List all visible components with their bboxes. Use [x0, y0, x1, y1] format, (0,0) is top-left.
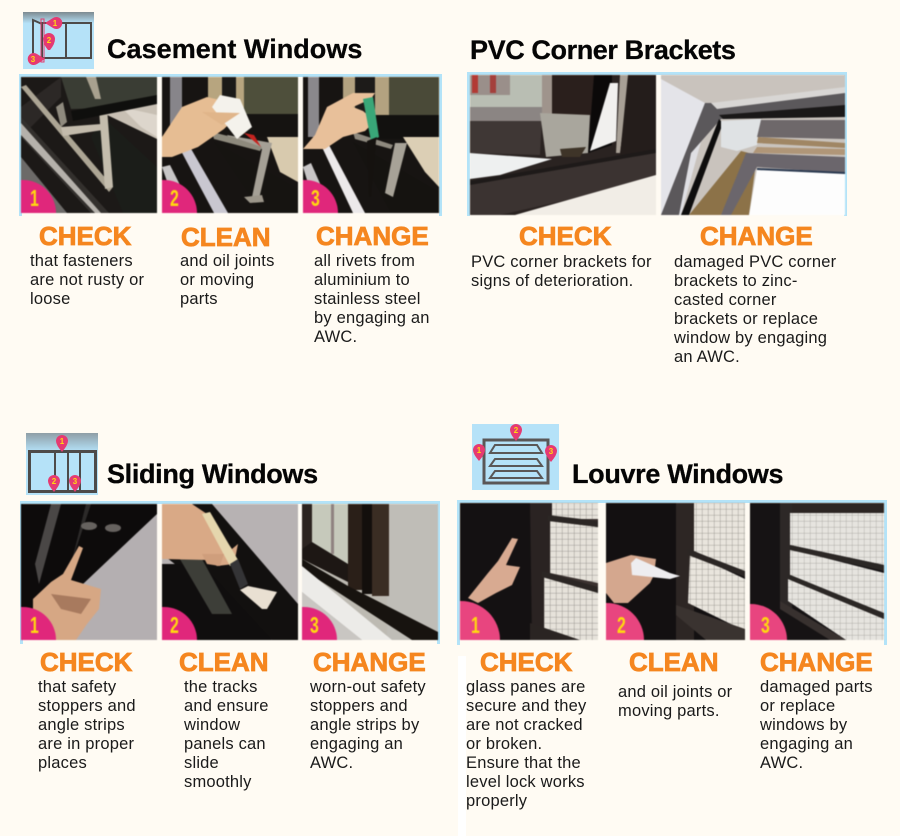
text: casted corner	[674, 291, 777, 309]
text: an AWC.	[674, 348, 740, 366]
text: all rivets from	[314, 252, 415, 270]
photo 1: 1	[30, 613, 39, 639]
text: brackets to zinc-	[674, 272, 798, 290]
panel: sliding windows	[20, 433, 440, 791]
text: and ensure	[184, 697, 269, 715]
photo 2	[660, 74, 846, 216]
text: angle strips by	[310, 716, 419, 734]
icon: sliding window diagram: 1	[60, 437, 65, 446]
label: CHECK	[519, 221, 611, 251]
text: angle strips	[38, 716, 125, 734]
text: glass panes are	[466, 678, 586, 696]
white strip	[458, 656, 466, 836]
photo 2: 2	[617, 613, 626, 639]
photo 1	[20, 76, 158, 214]
photo frame	[457, 500, 887, 645]
heading: Casement Windows	[107, 34, 362, 64]
photo 2: 2	[170, 186, 179, 212]
text: that safety	[38, 678, 116, 696]
text	[760, 678, 873, 772]
text: moving parts.	[618, 702, 720, 720]
icon: louvre window diagram	[472, 424, 559, 490]
photo 1: 1	[30, 186, 39, 212]
panel: louvre windows	[457, 424, 887, 810]
photo 1	[20, 503, 158, 641]
photo 3	[749, 502, 885, 641]
photo 3	[302, 76, 440, 214]
label: CLEAN	[179, 647, 269, 677]
photo frame	[467, 72, 847, 216]
text: are in proper	[38, 735, 134, 753]
CHANGE column	[760, 647, 873, 772]
photo 1	[469, 74, 657, 216]
text: damaged parts	[760, 678, 873, 696]
text: slide	[184, 754, 219, 772]
text: or replace	[760, 697, 835, 715]
label: CLEAN	[181, 222, 271, 252]
label: CHECK	[480, 647, 572, 677]
text: worn-out safety	[310, 678, 426, 696]
photo 3: 3	[761, 613, 770, 639]
CHANGE column	[314, 221, 430, 346]
photo 3	[301, 503, 439, 641]
text: properly	[466, 792, 527, 810]
CHECK column	[38, 647, 136, 772]
text: AWC.	[310, 754, 353, 772]
icon: louvre window diagram: 2	[514, 426, 519, 435]
icon: casement window diagram: 3	[31, 55, 36, 64]
photo 2	[605, 502, 746, 641]
text: stainless steel	[314, 290, 421, 308]
CHECK column	[30, 221, 144, 308]
heading: Sliding Windows	[107, 459, 318, 489]
panel: pvc corner brackets	[467, 35, 847, 366]
text: by engaging an	[314, 309, 430, 327]
photo 1: 1	[471, 613, 480, 639]
label: CHECK	[39, 221, 131, 251]
text: places	[38, 754, 87, 772]
text: level lock works	[466, 773, 585, 791]
text: stoppers and	[38, 697, 136, 715]
icon: louvre window diagram: 3	[549, 447, 554, 456]
text: windows by	[760, 716, 847, 734]
heading: Louvre Windows	[572, 459, 783, 489]
CLEAN column	[618, 647, 732, 720]
icon: casement window diagram	[23, 12, 94, 69]
text: the tracks	[184, 678, 258, 696]
CHECK column	[471, 221, 652, 290]
text	[180, 252, 275, 308]
icon: casement window diagram: 2	[47, 36, 52, 45]
text	[618, 683, 732, 720]
text: Ensure that the	[466, 754, 581, 772]
text: brackets or replace	[674, 310, 818, 328]
text: PVC corner brackets for	[471, 253, 652, 271]
icon: sliding window diagram	[26, 433, 98, 495]
text: panels can	[184, 735, 266, 753]
CHECK column	[466, 647, 586, 810]
label: CHANGE	[313, 647, 426, 677]
icon: sliding window diagram: 2	[52, 477, 57, 486]
photo frame	[20, 501, 440, 644]
text: window	[184, 716, 240, 734]
icon: sliding window diagram: 3	[73, 477, 78, 486]
label: CHANGE	[760, 647, 873, 677]
label: CLEAN	[629, 647, 719, 677]
text: that fasteners	[30, 252, 133, 270]
CLEAN column	[180, 222, 275, 308]
text: or moving	[180, 271, 254, 289]
text	[314, 252, 430, 346]
CLEAN column	[179, 647, 269, 791]
text: window by engaging	[674, 329, 827, 347]
text: parts	[180, 290, 218, 308]
text: and oil joints or	[618, 683, 732, 701]
text: are not cracked	[466, 716, 583, 734]
label: CHECK	[40, 647, 132, 677]
text: secure and they	[466, 697, 586, 715]
text	[466, 678, 586, 810]
icon: casement window diagram: 1	[53, 19, 58, 28]
heading: PVC Corner Brackets	[470, 35, 736, 65]
text: engaging an	[310, 735, 403, 753]
label: CHANGE	[316, 221, 429, 251]
photo 2: 2	[170, 613, 179, 639]
panel: casement windows	[19, 12, 442, 346]
label: CHANGE	[700, 221, 813, 251]
text: smoothly	[184, 773, 252, 791]
text: loose	[30, 290, 70, 308]
photo 2	[161, 76, 299, 214]
text	[30, 252, 144, 308]
text: engaging an	[760, 735, 853, 753]
text: damaged PVC corner	[674, 253, 836, 271]
photo 1	[459, 502, 599, 641]
text	[184, 678, 269, 791]
photo frame	[19, 74, 442, 216]
text	[674, 253, 836, 366]
photo 3: 3	[311, 186, 320, 212]
text: signs of deterioration.	[471, 272, 633, 290]
text: are not rusty or	[30, 271, 144, 289]
text	[310, 678, 426, 772]
text: AWC.	[314, 328, 357, 346]
photo 2	[161, 503, 299, 641]
CHANGE column	[674, 221, 836, 366]
icon: louvre window diagram: 1	[477, 446, 482, 455]
text: stoppers and	[310, 697, 408, 715]
text: aluminium to	[314, 271, 410, 289]
photo 3: 3	[310, 613, 319, 639]
text: AWC.	[760, 754, 803, 772]
text: and oil joints	[180, 252, 275, 270]
text	[38, 678, 136, 772]
text	[471, 253, 652, 290]
text: or broken.	[466, 735, 542, 753]
CHANGE column	[310, 647, 426, 772]
